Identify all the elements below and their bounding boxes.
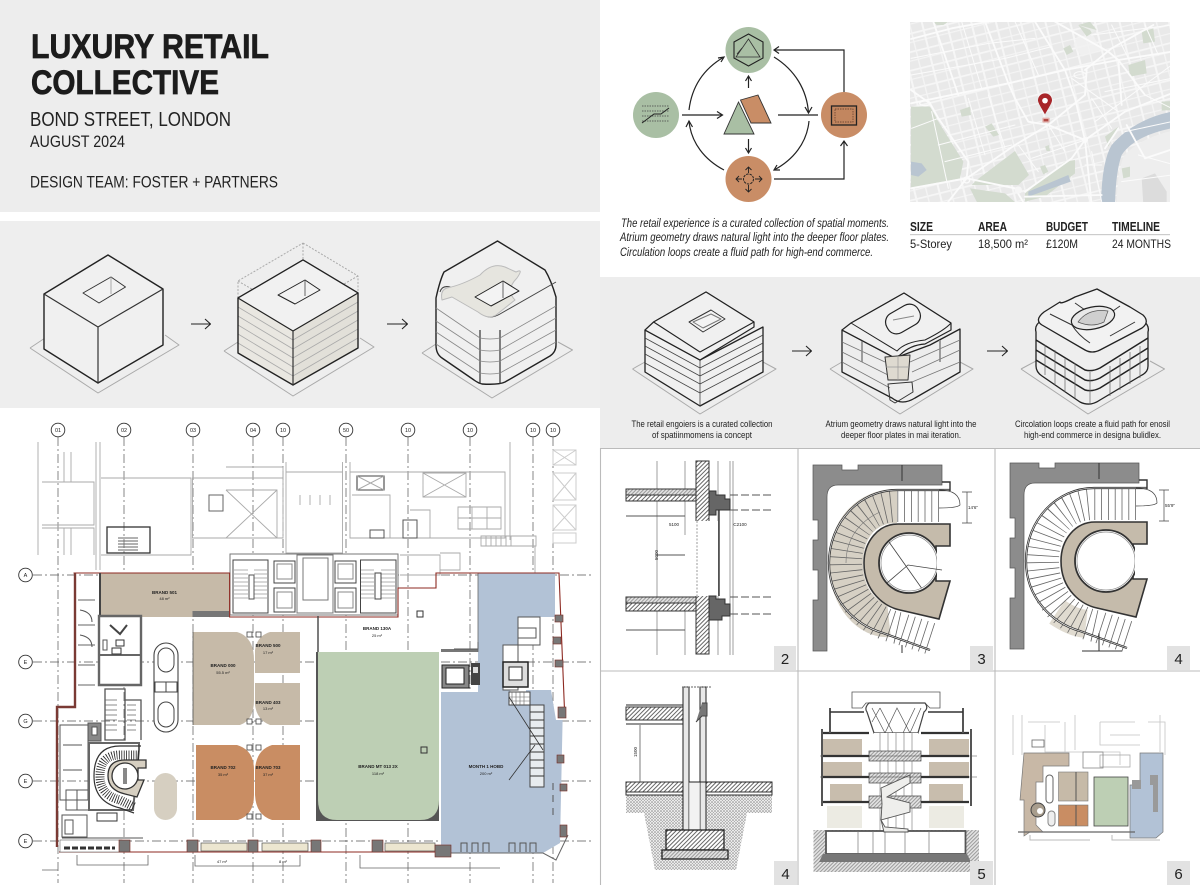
map pin bbox=[1038, 93, 1052, 123]
zone: brand 500: 17 m² bbox=[263, 650, 274, 655]
date: AUGUST 2024 bbox=[30, 132, 125, 151]
panel: massing diagrams row one bbox=[0, 221, 600, 408]
detail 4b: foundation section: 1500 bbox=[633, 746, 638, 757]
grid lines and bubbles: 10 bbox=[405, 428, 411, 434]
caption one: of spatiinmomens ia concept bbox=[652, 430, 752, 441]
outer walls bbox=[57, 573, 568, 860]
caption three: Circolation loops create a fluid path for enosil bbox=[1015, 419, 1170, 430]
concept text: Circulation loops create a fluid path for high-end commerce. bbox=[620, 247, 873, 259]
detail 4: spiral stair plan: 55'9" bbox=[1165, 503, 1175, 508]
grid lines and bubbles: E bbox=[24, 660, 28, 666]
zone: brand 703: BRAND 703 bbox=[255, 765, 281, 770]
centre form bbox=[724, 95, 771, 134]
caption two bbox=[826, 419, 976, 441]
detail 4: spiral stair plan bbox=[1010, 463, 1190, 670]
arrow bbox=[387, 319, 408, 329]
design team: DESIGN TEAM: FOSTER + PARTNERS bbox=[30, 172, 278, 192]
facade strip: 8 m² bbox=[279, 859, 288, 864]
zone: brand main hall: 118 m² bbox=[372, 771, 385, 776]
main roads bbox=[911, 22, 1175, 205]
zone: brand main hall bbox=[316, 652, 439, 821]
grid lines and bubbles: 02 bbox=[121, 428, 127, 434]
detail 2: facade section: 2 bbox=[781, 651, 789, 668]
stair core top left bbox=[107, 476, 417, 553]
arrow bbox=[792, 346, 812, 356]
timeline column: 24 MONTHS bbox=[1112, 237, 1171, 251]
massing block 1 bbox=[30, 255, 179, 393]
size column: SIZE bbox=[910, 220, 933, 234]
zone: brand 501: BRAND 501 bbox=[152, 590, 177, 595]
panel: concept cycle diagram bbox=[633, 27, 867, 202]
zone: brand 703 bbox=[255, 745, 300, 820]
zone: brand 702: BRAND 702 bbox=[210, 765, 236, 770]
title bbox=[31, 28, 269, 102]
caption one: The retail engoiers is a curated collection bbox=[632, 419, 772, 430]
area column: 18,500 m² bbox=[978, 237, 1028, 251]
grid lines and bubbles: 10 bbox=[550, 428, 556, 434]
arrow bbox=[987, 346, 1008, 356]
zone: brand 403: 13 m² bbox=[263, 706, 274, 711]
detail 2: facade section: C2100 bbox=[733, 522, 747, 527]
concept text: The retail experience is a curated collection of spatial moments. bbox=[621, 218, 889, 230]
grid lines and bubbles: 10 bbox=[530, 428, 536, 434]
panel: title block bbox=[0, 0, 600, 212]
node: circulation bbox=[726, 156, 772, 202]
location: BOND STREET, LONDON bbox=[30, 108, 231, 131]
zone: brand 500: BRAND 500 bbox=[255, 643, 281, 648]
zone: blue tenant: MONTH 1 HOBD bbox=[469, 764, 504, 769]
grid lines and bubbles: 03 bbox=[190, 428, 196, 434]
light right drawing bbox=[553, 450, 576, 543]
zone: blue tenant bbox=[441, 573, 563, 853]
oval feature bbox=[154, 773, 177, 820]
grid lines and bubbles: 04 bbox=[250, 428, 256, 434]
facade strip bbox=[42, 615, 567, 870]
detail 4b: foundation section: 4 bbox=[781, 866, 790, 883]
node: plan bbox=[821, 92, 867, 138]
zone: brand 702: 35 m² bbox=[218, 772, 229, 777]
panel: floor plan bbox=[0, 408, 600, 896]
grid lines and bubbles: 10 bbox=[280, 428, 286, 434]
caption three bbox=[1015, 419, 1170, 441]
secondary roads bbox=[911, 22, 1175, 202]
grid lines and bubbles: E bbox=[24, 779, 28, 785]
caption three: high-end commerce in designa bulidlex. bbox=[1024, 430, 1161, 441]
size column bbox=[910, 220, 952, 251]
grid lines and bubbles: 50 bbox=[343, 428, 349, 434]
zone: brand 000: 55.5 m² bbox=[216, 670, 230, 675]
lift lobby: BRAND 130A bbox=[363, 626, 392, 631]
zone: brand 501: 48 m² bbox=[159, 596, 170, 601]
budget column bbox=[1046, 220, 1088, 251]
detail 4b: foundation section bbox=[626, 687, 797, 885]
location map bbox=[910, 22, 1175, 205]
parks bbox=[911, 22, 1172, 205]
stadium seating bbox=[154, 643, 178, 732]
area column bbox=[978, 220, 1028, 251]
office room bbox=[78, 600, 141, 685]
project data table bbox=[910, 220, 1171, 251]
detail 6: key plan: 6 bbox=[1174, 866, 1183, 883]
caption one bbox=[632, 419, 772, 441]
detail 4: spiral stair plan: 4 bbox=[1174, 651, 1183, 668]
detail 5: building section bbox=[814, 692, 993, 885]
zone: brand 403: BRAND 403 bbox=[255, 700, 281, 705]
adjacent rooms outline bbox=[38, 442, 536, 575]
grid lines and bubbles: E bbox=[24, 839, 28, 845]
panel: detail drawings grid bbox=[600, 448, 1200, 885]
detail 2: facade section bbox=[626, 461, 796, 670]
detail 3: spiral stair shaded bbox=[813, 465, 993, 670]
grid lines and bubbles: A bbox=[24, 573, 28, 579]
grid lines and bubbles: 01 bbox=[55, 428, 61, 434]
budget column: BUDGET bbox=[1046, 220, 1088, 234]
zone: blue tenant: 200 m² bbox=[480, 771, 493, 776]
size column: 5-Storey bbox=[910, 237, 952, 251]
node: massing bbox=[726, 27, 772, 73]
area column: AREA bbox=[978, 220, 1007, 234]
budget column: £120M bbox=[1046, 237, 1078, 251]
detail 5: building section: 5 bbox=[977, 866, 986, 883]
lift lobby: 25 m² bbox=[372, 633, 383, 638]
concept text: Atrium geometry draws natural light into the deeper floor plates. bbox=[619, 232, 889, 244]
grid lines and bubbles bbox=[19, 423, 592, 883]
spiral stair bbox=[89, 743, 146, 821]
detail 6: key plan bbox=[1013, 715, 1190, 885]
zone: brand 000: BRAND 000 bbox=[210, 663, 236, 668]
grid lines and bubbles: G bbox=[23, 719, 28, 725]
toilets and core bbox=[60, 689, 143, 838]
timeline column: TIMELINE bbox=[1112, 220, 1160, 234]
title: LUXURY RETAIL bbox=[31, 28, 269, 66]
zone: brand 500 bbox=[255, 632, 300, 673]
grid lines and bubbles: 10 bbox=[467, 428, 473, 434]
iteration block C bbox=[1021, 289, 1164, 414]
arrow bbox=[191, 319, 210, 329]
water bbox=[911, 111, 1175, 205]
massing block 2 bbox=[224, 243, 374, 396]
panel: massing iterations row two bbox=[600, 277, 1200, 448]
column markers bbox=[247, 632, 261, 819]
lift lobby bbox=[363, 573, 480, 688]
node: analysis bbox=[633, 92, 679, 138]
title: COLLECTIVE bbox=[31, 64, 219, 102]
zone: brand 000 bbox=[193, 632, 254, 725]
massing block 3 bbox=[422, 241, 572, 398]
concept text bbox=[619, 218, 889, 259]
zone: brand main hall: BRAND MT 013 2X bbox=[358, 764, 398, 769]
detail 3: spiral stair shaded: 14'6" bbox=[968, 505, 978, 510]
service core bbox=[230, 554, 398, 615]
iteration block B bbox=[830, 293, 973, 414]
iteration block A bbox=[632, 292, 776, 414]
zone: brand 403 bbox=[255, 683, 300, 725]
zone: brand 702 bbox=[196, 745, 254, 820]
cycle arrows bbox=[682, 46, 848, 179]
zone: brand 703: 37 m² bbox=[263, 772, 274, 777]
facade strip: 47 m² bbox=[217, 859, 228, 864]
caption two: Atrium geometry draws natural light into the bbox=[826, 419, 976, 430]
caption two: deeper floor plates in mai iteration. bbox=[841, 430, 961, 441]
captions bbox=[632, 419, 1170, 441]
detail 2: facade section: 5100 bbox=[669, 522, 680, 527]
detail 2: facade section: 5000 bbox=[654, 549, 659, 560]
zone: brand 501 bbox=[100, 573, 229, 617]
timeline column bbox=[1112, 220, 1171, 251]
detail 3: spiral stair shaded: 3 bbox=[977, 651, 986, 668]
